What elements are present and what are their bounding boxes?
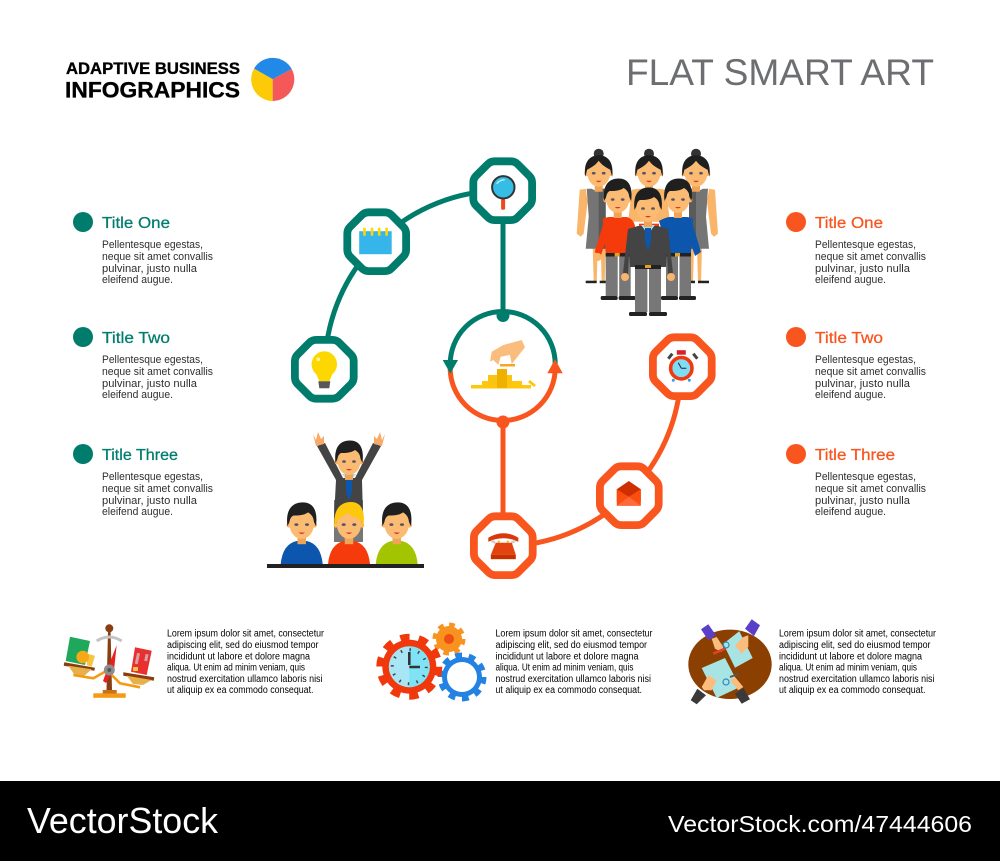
text block: column one: adipiscing elit, sed do eiusmod tempor [167,640,319,651]
left legend [73,212,214,518]
legend item: title two: Title Two [102,330,170,347]
legend item: right title one: neque sit amet convallis [815,251,927,263]
node: magnifier [473,161,532,220]
legend item: right title one: Title One [815,215,883,232]
central cycle [443,309,563,428]
gear: orange [434,624,464,654]
person: blond red sweater [328,502,370,564]
legend item: title two [73,327,214,401]
legend item: title three [73,444,214,518]
icon: logo pie [251,58,294,101]
node: envelope [600,466,659,525]
legend item: title one: Title One [102,215,170,232]
text block: column two: Lorem ipsum dolor sit amet, consectetur [496,628,653,640]
logo heading: ADAPTIVE BUSINESS [66,60,240,78]
legend item: right title one: eleifend augue. [815,274,886,286]
legend item: right title one: Pellentesque egestas, [815,239,916,251]
right legend [786,212,927,518]
person: right man [659,178,701,300]
legend item: right title three: pulvinar, justo nulla [815,495,910,507]
legend item: right title three [786,444,927,518]
legend item: title two: Pellentesque egestas, [102,354,203,366]
legend item: title three: Title Three [102,447,178,464]
legend item: right title two: eleifend augue. [815,389,886,401]
footer bar: VectorStock [27,800,219,841]
text block: column two: aliqua. Ut enim ad minim veniam, quis [496,663,634,674]
text block: column three: incididunt ut labore et dolore magna [779,651,922,662]
node: telephone [474,516,533,575]
table [267,564,424,568]
illustration: team of six [577,149,718,316]
footer bar: VectorStock.com/47444606 [668,811,972,837]
legend item: title three: pulvinar, justo nulla [102,495,197,507]
icon: balance scale [64,624,154,698]
text block: column three: ut aliquip ex ea commodo consequat. [779,685,926,696]
legend item: title two: neque sit amet convallis [102,366,214,378]
footer bar [0,781,1000,861]
logo heading: INFOGRAPHICS [65,77,240,102]
icon: hand and coins [471,340,536,388]
legend item: right title two: Pellentesque egestas, [815,354,916,366]
person: green sweater [376,502,418,564]
orange connector arc [503,367,681,546]
legend item: title three: Pellentesque egestas, [102,471,203,483]
legend item: right title two: neque sit amet convallis [815,366,927,378]
node: calendar [347,212,406,271]
person: left woman [577,149,613,283]
person: right woman [682,149,718,283]
legend item: title one: neque sit amet convallis [102,251,214,263]
legend item: title one [73,212,214,286]
person: man with raised arms [313,432,385,542]
legend item: title one: Pellentesque egestas, [102,239,203,251]
text block: column three [779,628,937,696]
person: blue sweater [281,502,323,564]
legend item: title one: eleifend augue. [102,274,173,286]
text block: column three: aliqua. Ut enim ad minim veniam, quis [779,663,917,674]
teal connector arc [325,190,503,369]
legend item: title two: pulvinar, justo nulla [102,378,197,390]
node: light bulb [295,340,354,399]
text block: column two: nostrud exercitation ullamco laboris nisi [496,674,651,685]
text block: column three: adipiscing elit, sed do eiusmod tempor [779,640,931,651]
logo heading [65,60,240,102]
text block: column one: ut aliquip ex ea commodo consequat. [167,685,314,696]
person: middle woman [628,149,670,234]
legend item: right title one [786,212,927,286]
icon: handshake table [688,619,772,704]
legend item: title three: eleifend augue. [102,506,173,518]
node: alarm clock [653,337,712,396]
text block: column one: aliqua. Ut enim ad minim veniam, quis [167,663,305,674]
legend item: right title two [786,327,927,401]
legend item: title three: neque sit amet convallis [102,483,214,495]
title: FLAT SMART ART [626,51,934,93]
text block: column one [167,628,325,696]
text block: column two: ut aliquip ex ea commodo consequat. [496,685,642,696]
text block: column one: incididunt ut labore et dolore magna [167,651,310,662]
legend item: right title two: Title Two [815,330,883,347]
icon: gears and clock [380,624,484,699]
legend item: right title two: pulvinar, justo nulla [815,378,910,390]
text block: column three: nostrud exercitation ullamco laboris nisi [779,674,934,685]
legend item: right title three: eleifend augue. [815,506,886,518]
illustration: cheering team [267,432,424,568]
legend item: right title one: pulvinar, justo nulla [815,263,910,275]
person: left man [594,178,636,300]
legend item: right title three: neque sit amet convallis [815,483,927,495]
text block: column three: Lorem ipsum dolor sit amet, consectetur [779,628,937,640]
text block: column two [496,628,653,696]
text block: column one: Lorem ipsum dolor sit amet, consectetur [167,628,325,640]
gear: red clock [380,637,439,696]
legend item: right title three: Title Three [815,447,895,464]
legend item: title one: pulvinar, justo nulla [102,263,197,275]
text block: column one: nostrud exercitation ullamco laboris nisi [167,674,322,685]
person: centre man in suit [621,188,675,316]
legend item: right title three: Pellentesque egestas, [815,471,916,483]
text block: column two: incididunt ut labore et dolore magna [496,651,639,662]
gear: blue [440,655,484,699]
text block: column two: adipiscing elit, sed do eiusmod tempor [496,640,648,651]
legend item: title two: eleifend augue. [102,389,173,401]
